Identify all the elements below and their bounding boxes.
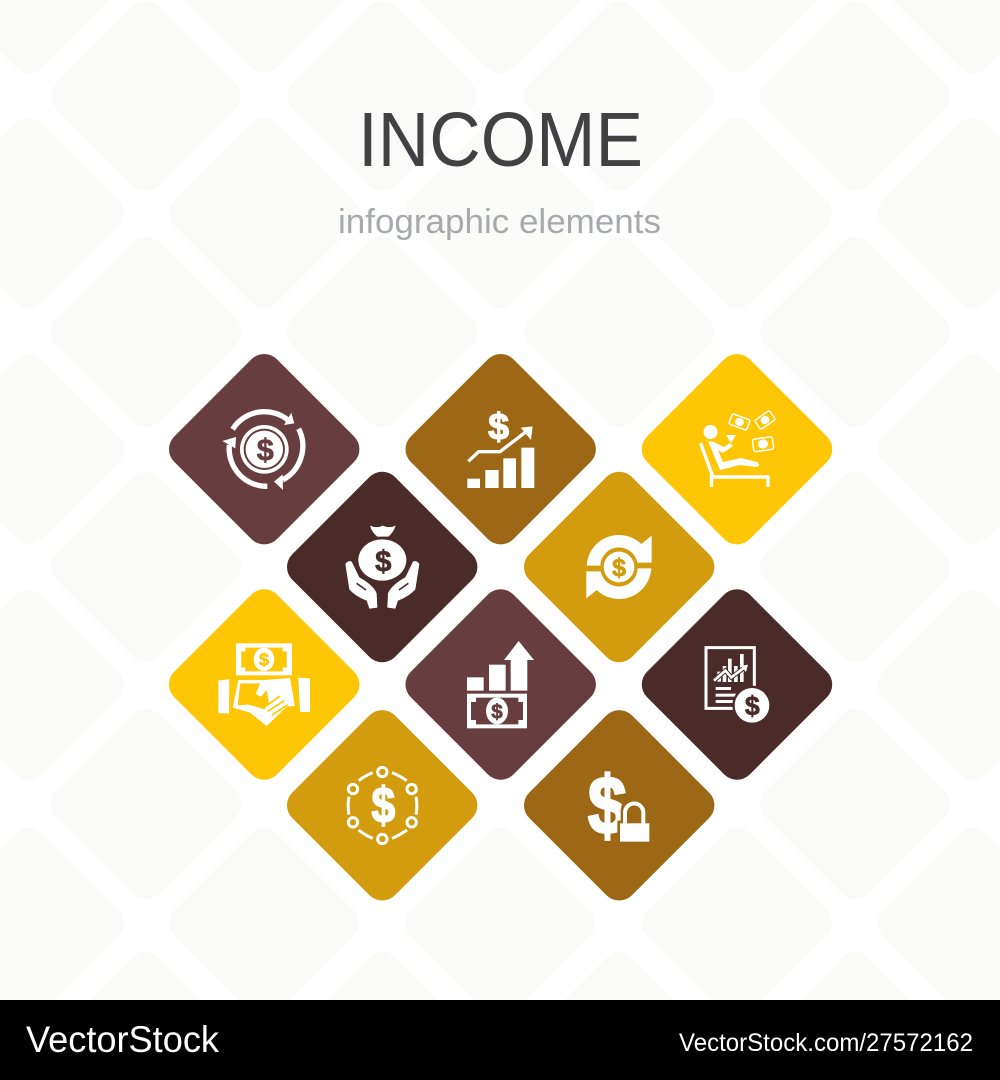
panel: bars rising over money — [398, 582, 603, 787]
icon: banknote over handshake: $ — [259, 650, 269, 670]
icon: dollar sign with padlock — [588, 760, 651, 852]
panel: passive income lounge — [634, 347, 840, 552]
icon: banknote with bars and up arrow — [467, 641, 534, 728]
panel: dollar network — [280, 703, 485, 908]
icon: money bag held by hands — [345, 526, 419, 609]
icon: dollar with two circular arrows — [586, 535, 652, 599]
icon: report document with dollar coin — [706, 648, 772, 725]
panel: recurring income cycle — [162, 347, 367, 552]
title: INCOME — [358, 97, 643, 183]
icon: dollar with two circular arrows: $ — [612, 554, 626, 582]
icon: report document with dollar coin: $ — [745, 691, 760, 721]
icon: dollar with rising bars and arrow — [467, 405, 534, 488]
icon: banknote with bars and up arrow: $ — [491, 701, 503, 724]
panel: currency exchange cycle — [517, 464, 722, 670]
icon: banknote over handshake — [218, 643, 310, 726]
panel: money bag in hands — [280, 464, 485, 670]
panel: financial report — [634, 582, 840, 787]
icon: coin with circular arrows: $ — [257, 433, 274, 467]
panel: income growth chart — [398, 347, 603, 552]
footer url text: VectorStock.com/27572162 — [679, 1029, 973, 1057]
icon: dollar sign with padlock: $ — [588, 760, 627, 852]
icon: coin with circular arrows — [222, 412, 303, 490]
subtitle: infographic elements — [338, 203, 661, 241]
panel: locked dollar — [517, 703, 722, 908]
icon: person on lounge chair with flying money — [700, 410, 776, 487]
panel: handshake deal — [162, 582, 367, 787]
icon: dollar within ring of nodes: $ — [372, 777, 395, 833]
icon: money bag held by hands: $ — [375, 546, 391, 579]
footer logo text: VectorStock — [26, 1019, 219, 1060]
icon: dollar with rising bars and arrow: $ — [488, 405, 509, 447]
footer bar — [0, 1000, 1000, 1080]
icon: dollar within ring of nodes — [348, 767, 417, 844]
